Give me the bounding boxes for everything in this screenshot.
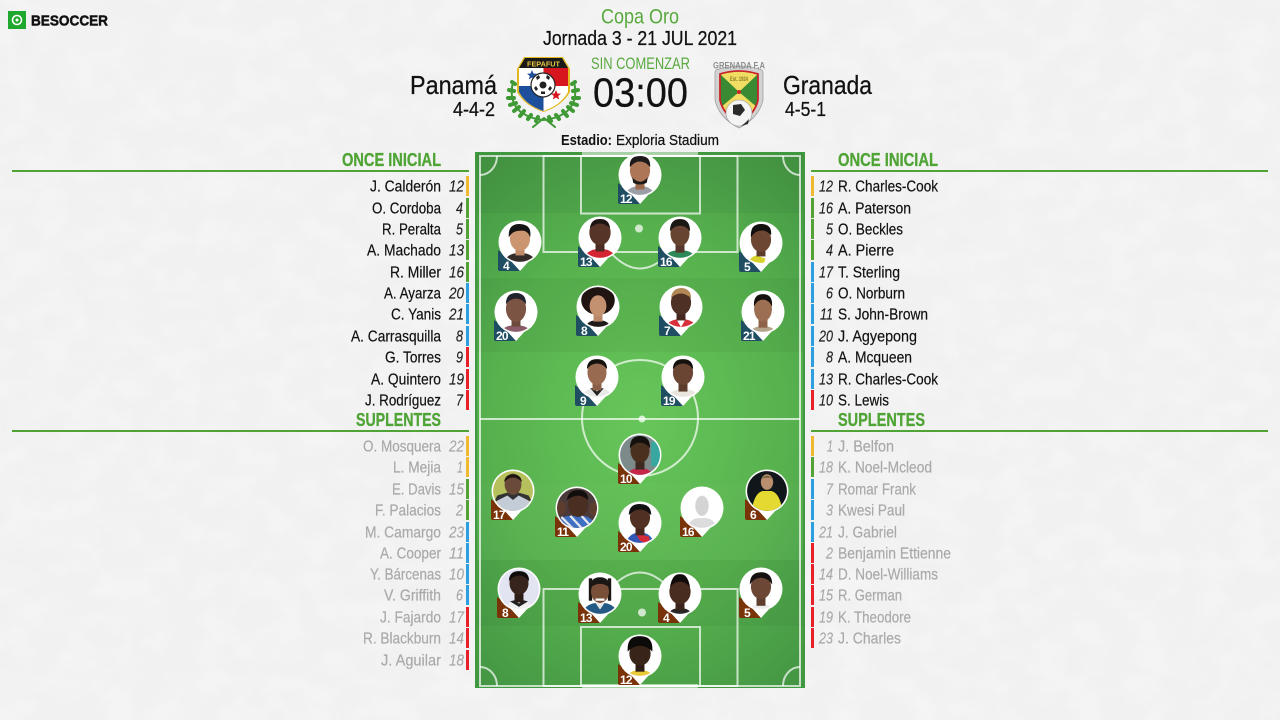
player: away 5: 5 bbox=[744, 606, 751, 620]
row: J. Fajardo: 17 bbox=[449, 610, 465, 626]
row: Kwesi Paul: 3 bbox=[826, 502, 833, 520]
player: home 16: 16 bbox=[660, 255, 673, 269]
row: R. Charles-Cook (13): 13 bbox=[819, 372, 833, 388]
player: home 7: 7 bbox=[664, 324, 671, 338]
row: A. Mcqueen: A. Mcqueen bbox=[838, 350, 912, 366]
player: away 11: 11 bbox=[557, 525, 569, 539]
row: A. Quintero: 19 bbox=[449, 372, 464, 388]
row: O. Norburn bbox=[811, 283, 905, 303]
player: home 21: 21 bbox=[743, 329, 756, 343]
row: A. Paterson: A. Paterson bbox=[838, 200, 911, 218]
row: J. Fajardo: J. Fajardo bbox=[380, 610, 441, 626]
row: R. Charles-Cook: 12 bbox=[819, 178, 833, 196]
player: away 17 bbox=[491, 469, 535, 522]
player: home 8: 8 bbox=[581, 324, 588, 338]
kick-off time: 03:00 bbox=[593, 70, 688, 116]
row: O. Norburn: O. Norburn bbox=[838, 286, 905, 302]
player: away 4: 4 bbox=[663, 611, 670, 625]
match status: SIN COMENZAR bbox=[591, 55, 690, 73]
row: S. Lewis: 10 bbox=[819, 392, 833, 410]
player: away 16 placeholder: 16 bbox=[682, 525, 695, 539]
panel: football pitch bbox=[475, 152, 805, 688]
row: K. Theodore bbox=[811, 607, 911, 627]
player: home GK 12: 12 bbox=[620, 192, 633, 206]
player: away 13: 13 bbox=[580, 611, 593, 625]
row: R. Charles-Cook bbox=[811, 176, 939, 196]
crest: Panama bbox=[508, 57, 579, 127]
row: A. Mcqueen: 8 bbox=[826, 350, 833, 366]
away team name: Granada bbox=[783, 70, 872, 100]
row: J. Calderón: J. Calderón bbox=[370, 178, 441, 196]
row: L. Mejia bbox=[393, 457, 469, 477]
row: G. Torres: 9 bbox=[456, 350, 463, 366]
player: home 7 bbox=[659, 286, 702, 338]
home formation: 4-4-2 bbox=[453, 99, 495, 121]
row: A. Paterson bbox=[811, 198, 911, 218]
stadium label: Estadio: bbox=[561, 132, 612, 149]
row: E. Davis: E. Davis bbox=[392, 482, 441, 498]
row: Benjamin Ettienne: Benjamin Ettienne bbox=[838, 546, 951, 562]
row: S. John-Brown bbox=[811, 304, 928, 324]
row: K. Theodore: 19 bbox=[819, 610, 833, 626]
row: Romar Frank: Romar Frank bbox=[838, 482, 917, 498]
row: A. Cooper: 11 bbox=[449, 546, 464, 562]
row: A. Quintero: A. Quintero bbox=[371, 372, 441, 388]
player: home 19 bbox=[661, 356, 704, 408]
stadium label bbox=[561, 132, 719, 149]
row: S. Lewis: S. Lewis bbox=[838, 392, 889, 410]
logo: BeSoccer bbox=[8, 11, 108, 30]
competition title: Copa Oro bbox=[601, 6, 679, 28]
row: J. Agyepong bbox=[811, 326, 917, 346]
row: J. Aguilar bbox=[381, 650, 469, 670]
player: away 11 bbox=[555, 486, 599, 539]
player: home 20 bbox=[494, 290, 538, 343]
row: Benjamin Ettienne: 2 bbox=[825, 546, 833, 562]
row: O. Mosquera: O. Mosquera bbox=[363, 438, 441, 456]
row: D. Noel-Williams bbox=[811, 564, 938, 584]
row: Y. Bárcenas: Y. Bárcenas bbox=[370, 566, 441, 584]
row: K. Theodore: K. Theodore bbox=[838, 610, 911, 626]
row: J. Rodríguez: 7 bbox=[456, 392, 464, 410]
row: C. Yanis bbox=[391, 304, 469, 324]
row: J. Calderón: 12 bbox=[449, 178, 464, 196]
row: J. Agyepong: J. Agyepong bbox=[838, 328, 917, 346]
player: away 16 placeholder bbox=[680, 486, 724, 539]
row: A. Mcqueen bbox=[811, 347, 912, 367]
player: home 16 bbox=[658, 216, 702, 269]
row: J. Charles bbox=[811, 628, 901, 648]
player: away 10: 10 bbox=[620, 472, 633, 486]
panel: home starting eleven bbox=[12, 150, 469, 410]
player: home 13 bbox=[578, 216, 622, 269]
row: R. Blackburn: 14 bbox=[449, 630, 464, 648]
row: A. Pierre bbox=[811, 240, 894, 260]
row: C. Yanis: 21 bbox=[448, 306, 464, 324]
row: Romar Frank bbox=[811, 479, 917, 499]
row: J. Aguilar: 18 bbox=[449, 652, 464, 670]
player: away 17: 17 bbox=[493, 508, 506, 522]
player: away 20 bbox=[618, 502, 662, 554]
row: R. Blackburn: R. Blackburn bbox=[363, 630, 441, 648]
row: V. Griffith bbox=[384, 585, 469, 605]
row: R. Charles-Cook: R. Charles-Cook bbox=[838, 178, 939, 196]
row: K. Noel-Mcleod: K. Noel-Mcleod bbox=[838, 460, 932, 476]
player: home 21 bbox=[741, 290, 784, 343]
row: J. Gabriel: 21 bbox=[818, 524, 833, 542]
heading: away once inicial: ONCE INICIAL bbox=[838, 150, 938, 170]
player: away 6: 6 bbox=[750, 508, 757, 522]
row: T. Sterling: 17 bbox=[819, 264, 834, 282]
player: away 8: 8 bbox=[502, 606, 509, 620]
row: G. Torres: G. Torres bbox=[385, 350, 441, 366]
player: home 19: 19 bbox=[663, 394, 676, 408]
row: R. Miller bbox=[390, 262, 469, 282]
row: O. Norburn: 6 bbox=[826, 286, 833, 302]
player: away 5 bbox=[739, 568, 782, 620]
player: home 4: 4 bbox=[503, 259, 510, 273]
player: away 20: 20 bbox=[620, 540, 633, 554]
row: J. Fajardo bbox=[380, 607, 469, 627]
row: Y. Bárcenas: 10 bbox=[449, 566, 464, 584]
player: away 6 bbox=[745, 469, 789, 522]
crest: Granada: GRENADA F.A bbox=[713, 60, 765, 70]
row: T. Sterling bbox=[811, 262, 900, 282]
row: K. Noel-Mcleod bbox=[811, 457, 932, 477]
row: C. Yanis: C. Yanis bbox=[391, 306, 441, 324]
row: S. John-Brown: 11 bbox=[820, 306, 833, 324]
row: O. Beckles bbox=[811, 219, 903, 239]
row: A. Carrasquilla: A. Carrasquilla bbox=[351, 328, 441, 346]
player: away GK 12: 12 bbox=[620, 673, 633, 687]
row: R. Peralta: R. Peralta bbox=[382, 222, 441, 238]
crest: Granada: Est. 1924 bbox=[730, 77, 748, 83]
row: J. Belfon: J. Belfon bbox=[838, 438, 894, 456]
home team name: Panamá bbox=[410, 70, 497, 100]
player: away 13 bbox=[578, 572, 622, 625]
row: D. Noel-Williams: D. Noel-Williams bbox=[838, 566, 938, 584]
player: home 13: 13 bbox=[580, 255, 593, 269]
row: J. Charles: J. Charles bbox=[838, 630, 901, 648]
row: O. Cordoba: 4 bbox=[456, 200, 463, 218]
row: S. John-Brown: S. John-Brown bbox=[838, 306, 928, 324]
heading: home suplentes: SUPLENTES bbox=[356, 410, 441, 430]
row: Romar Frank: 7 bbox=[826, 482, 834, 498]
row: A. Ayarza bbox=[384, 283, 469, 303]
row: A. Ayarza: A. Ayarza bbox=[384, 286, 441, 302]
row: Kwesi Paul bbox=[811, 500, 905, 520]
row: A. Carrasquilla: 8 bbox=[456, 328, 463, 346]
row: E. Davis: 15 bbox=[449, 482, 464, 498]
panel: away starting eleven bbox=[811, 150, 1268, 410]
row: R. German: R. German bbox=[838, 588, 902, 604]
row: O. Cordoba: O. Cordoba bbox=[372, 200, 441, 218]
row: R. Miller: R. Miller bbox=[390, 264, 442, 282]
row: K. Noel-Mcleod: 18 bbox=[819, 460, 833, 476]
player: home 9: 9 bbox=[580, 394, 587, 408]
row: R. Charles-Cook (13): R. Charles-Cook bbox=[838, 372, 939, 388]
panel: home substitutes bbox=[12, 410, 469, 670]
row: D. Noel-Williams: 14 bbox=[819, 566, 833, 584]
player: home 9 bbox=[575, 356, 618, 408]
stadium label: Exploria Stadium bbox=[616, 132, 719, 149]
row: L. Mejia: L. Mejia bbox=[393, 460, 441, 476]
player: home 5 bbox=[739, 222, 782, 274]
row: S. Lewis bbox=[811, 390, 889, 410]
row: L. Mejia: 1 bbox=[457, 460, 463, 476]
player: home 4 bbox=[498, 220, 542, 273]
row: A. Machado: A. Machado bbox=[367, 242, 441, 260]
row: J. Belfon bbox=[811, 436, 894, 456]
logo: BeSoccer: BESOCCER bbox=[31, 12, 108, 30]
row: R. Charles-Cook (13) bbox=[811, 369, 939, 389]
crest: Granada bbox=[713, 60, 765, 128]
row: F. Palacios bbox=[375, 500, 469, 520]
player: home 8 bbox=[576, 286, 620, 338]
player: home 20: 20 bbox=[496, 329, 509, 343]
row: J. Belfon: 1 bbox=[827, 438, 833, 456]
player: away 4 bbox=[658, 572, 702, 625]
row: V. Griffith: V. Griffith bbox=[384, 588, 441, 604]
row: J. Gabriel: J. Gabriel bbox=[838, 524, 897, 542]
row: J. Rodríguez: J. Rodríguez bbox=[365, 392, 441, 410]
row: R. German: 15 bbox=[819, 588, 833, 604]
row: J. Charles: 23 bbox=[818, 630, 833, 648]
row: A. Ayarza: 20 bbox=[448, 286, 464, 302]
heading: home once inicial: ONCE INICIAL bbox=[342, 150, 441, 170]
row: O. Mosquera: 22 bbox=[448, 438, 464, 456]
row: J. Gabriel bbox=[811, 522, 897, 542]
row: R. Miller: 16 bbox=[449, 264, 464, 282]
row: A. Machado: 13 bbox=[449, 242, 464, 260]
row: R. Peralta bbox=[382, 219, 469, 239]
row: T. Sterling: T. Sterling bbox=[838, 264, 900, 282]
panel: away substitutes bbox=[811, 410, 1268, 648]
row: Kwesi Paul: Kwesi Paul bbox=[838, 502, 905, 520]
row: F. Palacios: 2 bbox=[455, 502, 463, 520]
row: F. Palacios: F. Palacios bbox=[375, 502, 441, 520]
row: M. Camargo: M. Camargo bbox=[365, 524, 441, 542]
player: away GK 12 bbox=[618, 634, 662, 687]
row: E. Davis bbox=[392, 479, 469, 499]
row: A. Cooper bbox=[380, 543, 469, 563]
player: home GK 12 bbox=[618, 154, 662, 206]
row: Benjamin Ettienne bbox=[811, 543, 951, 563]
row: J. Agyepong: 20 bbox=[818, 328, 833, 346]
row: J. Aguilar: J. Aguilar bbox=[381, 652, 442, 670]
row: M. Camargo: 23 bbox=[448, 524, 464, 542]
row: G. Torres bbox=[385, 347, 469, 367]
away formation: 4-5-1 bbox=[785, 99, 826, 121]
row: R. Peralta: 5 bbox=[456, 222, 463, 238]
row: A. Pierre: A. Pierre bbox=[838, 242, 894, 260]
heading: away suplentes: SUPLENTES bbox=[838, 410, 925, 430]
row: A. Cooper: A. Cooper bbox=[380, 546, 442, 562]
row: R. German bbox=[811, 585, 902, 605]
player: away 8 bbox=[497, 567, 541, 620]
row: A. Pierre: 4 bbox=[826, 242, 833, 260]
matchday and date: Jornada 3 - 21 JUL 2021 bbox=[543, 28, 737, 50]
row: A. Paterson: 16 bbox=[819, 200, 833, 218]
row: O. Beckles: 5 bbox=[826, 222, 833, 238]
row: O. Beckles: O. Beckles bbox=[838, 222, 903, 238]
player: away 10 bbox=[618, 433, 662, 486]
row: V. Griffith: 6 bbox=[456, 588, 463, 604]
crest: Panama: FEPAFUT bbox=[527, 60, 560, 68]
player: home 5: 5 bbox=[744, 260, 751, 274]
